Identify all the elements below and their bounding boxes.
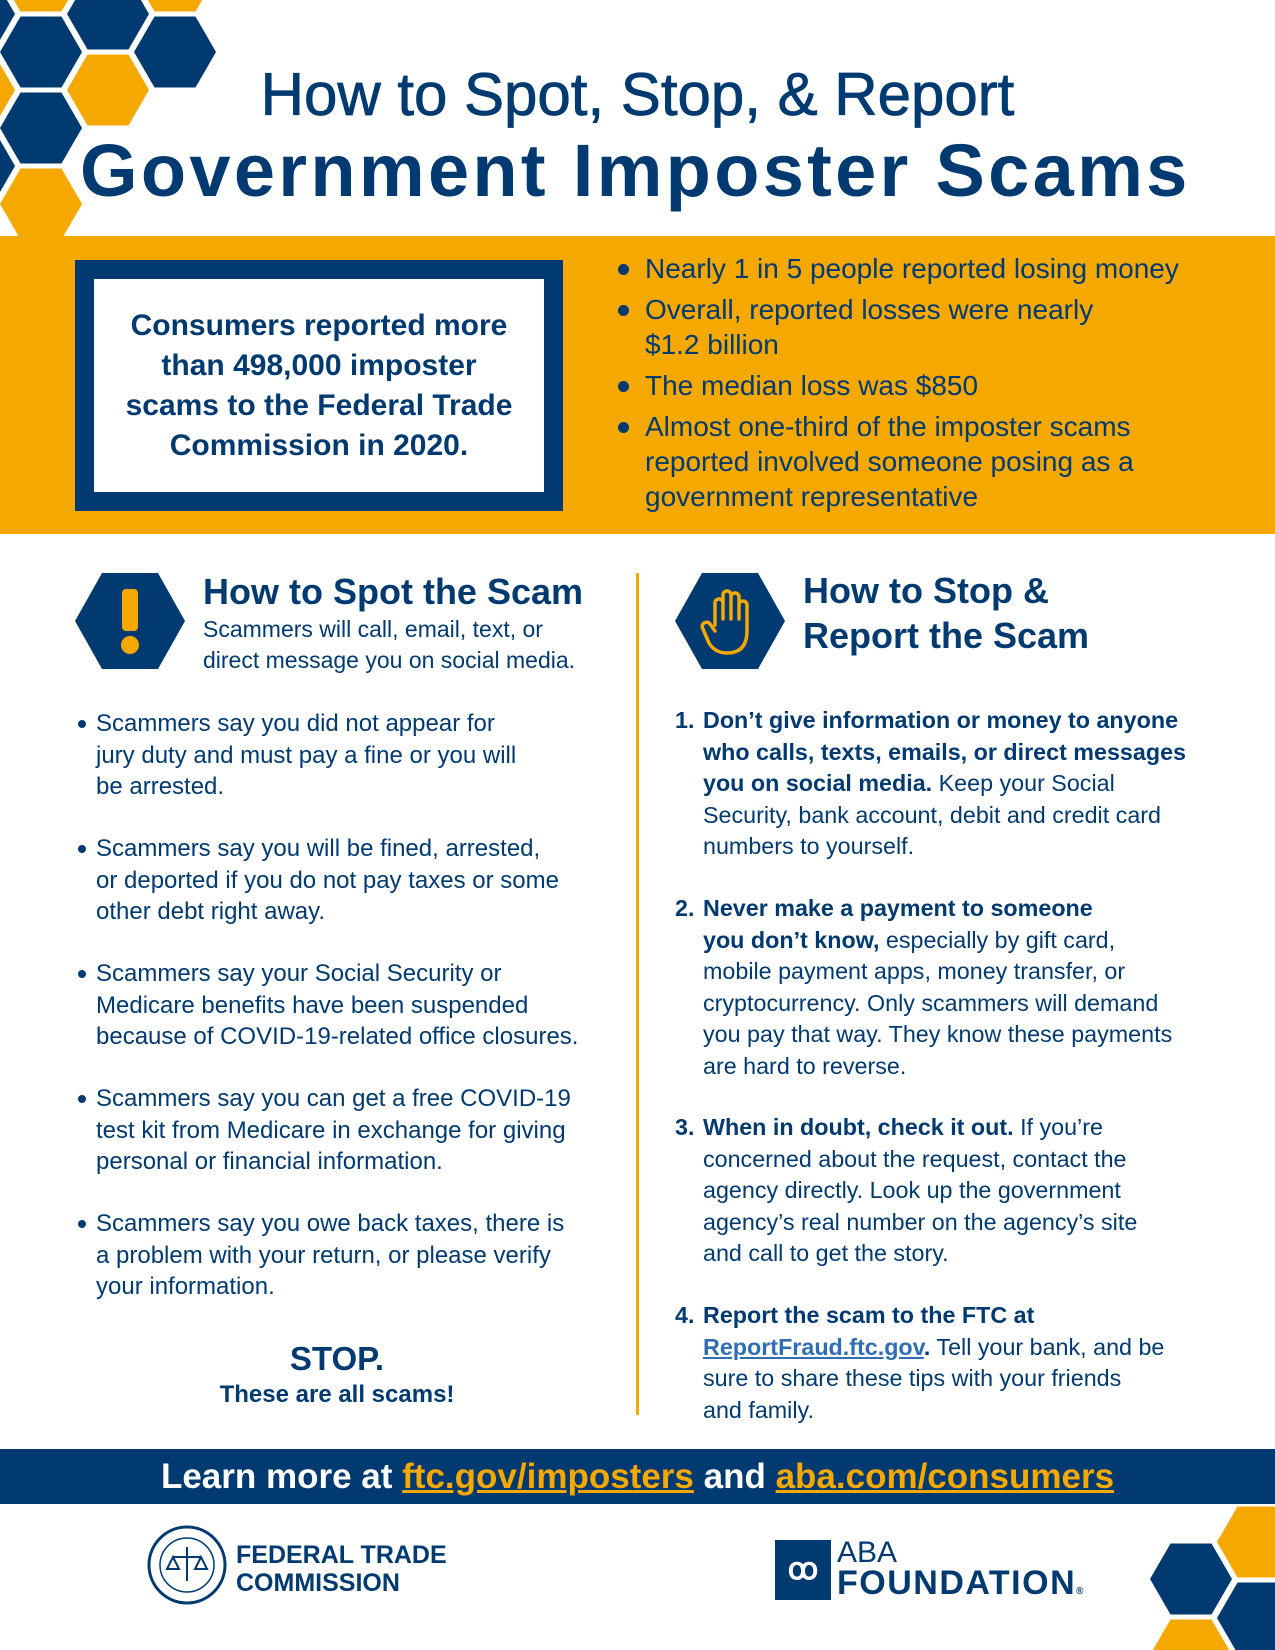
stats bullets — [618, 253, 1179, 512]
panel: stats band — [0, 236, 1275, 534]
text: agency’s real number on the agency’s site — [703, 1208, 1137, 1234]
stats bullets: reported involved someone posing as a — [645, 446, 1134, 477]
text: Report the scam to the FTC at — [703, 1302, 1034, 1328]
logo: ABA Foundation: ꝏ — [788, 1553, 818, 1586]
callout: key stat box: Consumers reported more — [131, 308, 507, 342]
callout: key stat box: scams to the Federal Trade — [126, 388, 512, 422]
text: concerned about the request, contact the — [703, 1146, 1127, 1172]
numbered steps: you on social media. Keep your Social — [703, 770, 1115, 796]
heading: spot: Scammers will call, email, text, or — [203, 616, 543, 642]
text: and family. — [703, 1396, 814, 1422]
numbered steps — [675, 707, 1186, 859]
spot bullets: Scammers say you did not appear for — [96, 710, 495, 737]
text: because of COVID-19-related office closures. — [96, 1023, 578, 1050]
title: How to Spot, Stop, & Report — [261, 61, 1014, 128]
text: test kit from Medicare in exchange for giving — [96, 1116, 566, 1144]
heading: spot — [203, 571, 583, 673]
footer banner — [0, 1449, 1275, 1504]
stats bullets: The median loss was $850 — [645, 370, 978, 401]
heading: stop & report: How to Stop & — [803, 570, 1049, 611]
callout: STOP: STOP. — [290, 1340, 384, 1377]
text: and call to get the story. — [703, 1240, 949, 1266]
text: When in doubt, check it out. If you’re — [703, 1114, 1103, 1140]
footer banner: Learn more at ftc.gov/imposters and aba.com/consumers — [161, 1457, 1114, 1496]
heading: stop & report — [803, 570, 1089, 656]
text: are hard to reverse. — [703, 1052, 906, 1078]
decoration: honeycomb bottom-right — [1150, 1506, 1275, 1650]
stats bullets: $1.2 billion — [645, 329, 779, 360]
numbered steps: Don’t give information or money to anyone — [703, 707, 1178, 733]
callout: key stat box: than 498,000 imposter — [161, 348, 477, 382]
text: Scammers say you will be fined, arrested, — [96, 835, 540, 862]
stats bullets: Overall, reported losses were nearly — [645, 294, 1093, 325]
title main: Government Imposter Scams — [80, 129, 1191, 212]
text: personal or financial information. — [96, 1148, 443, 1175]
text: 2. — [675, 895, 694, 921]
text: your information. — [96, 1273, 275, 1300]
text: Never make a payment to someone — [703, 895, 1093, 921]
spot bullets — [78, 708, 638, 802]
spot bullets: jury duty and must pay a fine or you will — [96, 742, 516, 768]
callout: key stat box: Commission in 2020. — [170, 428, 468, 462]
logo: ABA Foundation: ABA — [837, 1536, 897, 1569]
text: Scammers say you can get a free COVID-19 — [96, 1085, 571, 1112]
text: mobile payment apps, money transfer, or — [703, 958, 1125, 984]
text: Scammers say your Social Security or — [96, 960, 501, 987]
numbered steps: numbers to yourself. — [703, 833, 914, 859]
logo: FTC — [148, 1526, 447, 1604]
numbered steps: 1. — [675, 707, 694, 733]
text: cryptocurrency. Only scammers will demand — [703, 990, 1158, 1016]
text: you pay that way. They know these payments — [703, 1021, 1172, 1047]
text: a problem with your return, or please verify — [96, 1242, 551, 1268]
heading: spot: direct message you on social media. — [203, 647, 575, 673]
text: 4. — [675, 1302, 694, 1328]
callout: STOP — [220, 1340, 454, 1408]
stats bullets: Almost one-third of the imposter scams — [645, 411, 1131, 442]
callout: STOP: These are all scams! — [220, 1381, 454, 1408]
stats bullets: government representative — [645, 481, 978, 512]
heading: spot: How to Spot the Scam — [203, 571, 583, 612]
text: agency directly. Look up the government — [703, 1177, 1121, 1203]
text: you don’t know, especially by gift card, — [703, 926, 1115, 952]
logo: ABA Foundation — [775, 1536, 1085, 1602]
text: ReportFraud.ftc.gov. Tell your bank, and be — [703, 1334, 1164, 1360]
text: other debt right away. — [96, 898, 325, 925]
text: Medicare benefits have been suspended — [96, 992, 528, 1018]
icon: exclamation hexagon — [75, 573, 185, 669]
logo: FTC: FEDERAL TRADE — [236, 1541, 447, 1569]
stats bullets: Nearly 1 in 5 people reported losing money — [645, 253, 1179, 284]
numbered steps: Security, bank account, debit and credit card — [703, 802, 1161, 828]
spot bullets: be arrested. — [96, 773, 224, 800]
decoration: honeycomb top-left — [0, 0, 216, 236]
icon: hand hexagon — [675, 573, 785, 669]
text: 3. — [675, 1114, 694, 1140]
divider — [636, 573, 639, 1415]
logo: FTC: COMMISSION — [236, 1569, 400, 1597]
text: or deported if you do not pay taxes or some — [96, 866, 559, 894]
heading: stop & report: Report the Scam — [803, 615, 1089, 656]
text: sure to share these tips with your friends — [703, 1365, 1121, 1391]
text: Scammers say you owe back taxes, there is — [96, 1210, 564, 1237]
callout: key stat box — [75, 260, 563, 511]
logo: ABA Foundation: FOUNDATION® — [837, 1564, 1085, 1602]
numbered steps: who calls, texts, emails, or direct messages — [703, 738, 1186, 764]
